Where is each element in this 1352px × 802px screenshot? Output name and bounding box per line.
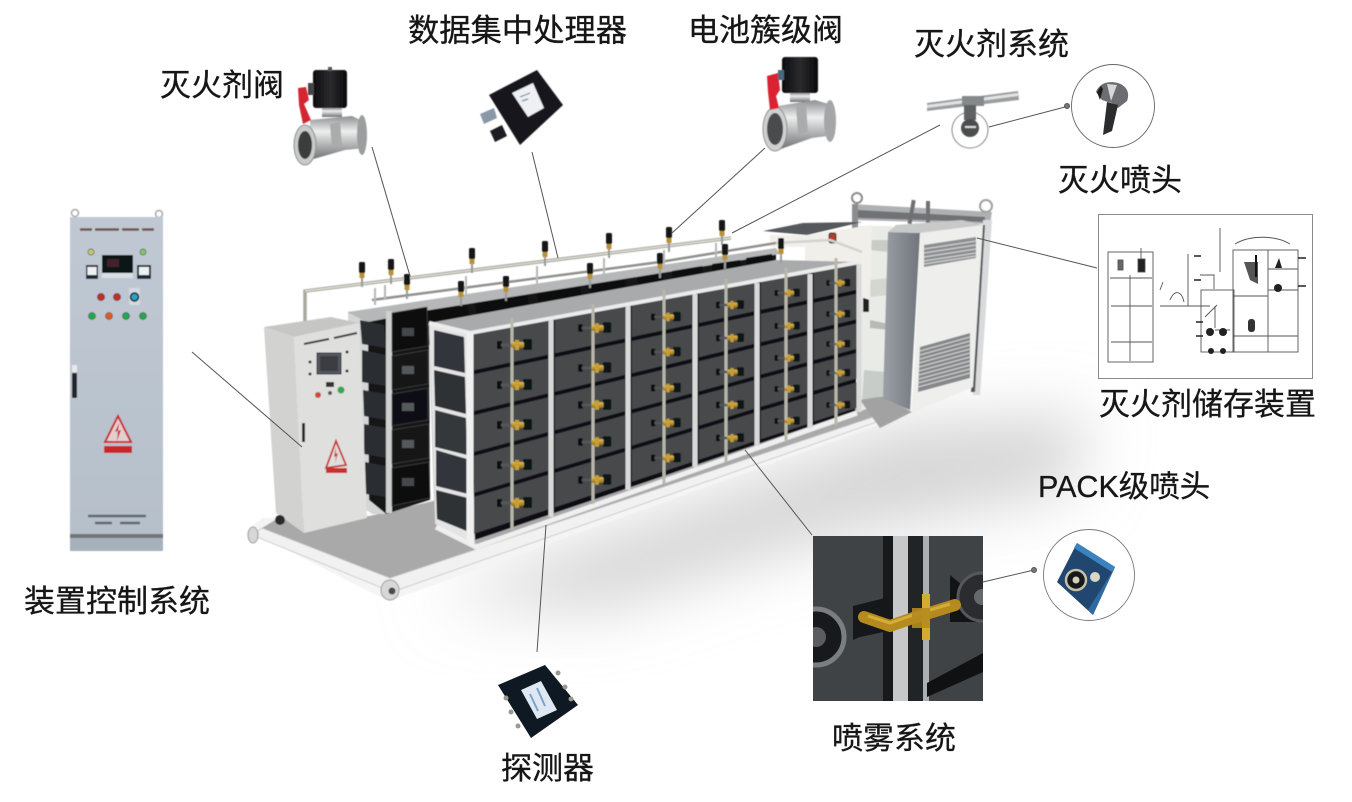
drawers column 6 bbox=[814, 264, 857, 422]
storage cabinet white face bbox=[912, 225, 983, 413]
digital display bbox=[102, 255, 133, 278]
upper louvre bbox=[924, 237, 976, 267]
interior tanks bbox=[858, 226, 912, 428]
label: 数据集中处理器: 数据集中处理器 bbox=[408, 13, 627, 48]
brass fitting bbox=[864, 594, 955, 640]
drawers column 2 bbox=[555, 306, 625, 507]
buttons bbox=[88, 288, 146, 320]
icon: fire system T pipe bbox=[927, 91, 1019, 148]
label: 电池簇级阀: 电池簇级阀 bbox=[688, 13, 843, 48]
icon: pack nozzle magnifier bbox=[1044, 530, 1134, 620]
leader lines bbox=[192, 104, 1097, 652]
drawers column 5 bbox=[761, 273, 807, 439]
vertical spray pipes bbox=[512, 258, 836, 530]
label: 喷雾系统: 喷雾系统 bbox=[832, 721, 956, 756]
icon: data processor bbox=[480, 70, 563, 145]
frame uprights and rails bbox=[429, 262, 860, 547]
door handle bbox=[72, 365, 77, 398]
platform base bbox=[248, 390, 915, 600]
label: 探测器: 探测器 bbox=[501, 751, 594, 786]
main container assembly bbox=[248, 193, 992, 600]
label: PACK级喷头: PACK级喷头 bbox=[1038, 470, 1210, 504]
warning sign bbox=[104, 416, 132, 453]
label: 灭火喷头: 灭火喷头 bbox=[1058, 163, 1182, 198]
drawers column 4 bbox=[699, 283, 754, 460]
icon: detector bbox=[498, 665, 578, 738]
floor shadow bbox=[430, 415, 1090, 610]
container end frame bbox=[852, 193, 992, 395]
warning triangle sign bbox=[326, 441, 347, 473]
front rack face bbox=[429, 258, 860, 547]
rear end equipment bbox=[763, 193, 992, 428]
label: 装置控制系统: 装置控制系统 bbox=[24, 584, 210, 619]
analog meters bbox=[86, 265, 151, 279]
panel: left control cabinet bbox=[70, 210, 163, 551]
storage cabinet grey side bbox=[883, 232, 920, 410]
lower louvre bbox=[918, 333, 970, 392]
right socket bbox=[950, 572, 983, 622]
left socket bbox=[813, 606, 846, 668]
icon: fire agent valve bbox=[294, 67, 367, 165]
icon: cluster valve bbox=[763, 57, 836, 151]
cabinet top bbox=[888, 220, 983, 233]
rack top black segments bbox=[428, 254, 774, 324]
pack fittings bbox=[497, 279, 850, 508]
cooling unit box bbox=[763, 222, 872, 300]
front rack end face bbox=[429, 323, 475, 545]
centre control cabinet bbox=[264, 317, 367, 533]
icon: nozzle magnifier bbox=[1072, 64, 1154, 148]
drawers column 1 bbox=[474, 320, 548, 534]
drawers column 3 bbox=[632, 294, 692, 482]
callout: storage device drawing bbox=[1098, 214, 1312, 378]
back battery rack bbox=[348, 248, 780, 514]
pipework bbox=[305, 238, 862, 324]
callout: spray system close-up bbox=[813, 536, 983, 701]
small circle bbox=[952, 112, 988, 148]
top cluster valves bbox=[359, 220, 784, 306]
label: 灭火剂系统: 灭火剂系统 bbox=[914, 27, 1069, 62]
label: 灭火剂储存装置: 灭火剂储存装置 bbox=[1099, 387, 1316, 422]
label: 灭火剂阀: 灭火剂阀 bbox=[160, 68, 284, 103]
front rack top surface bbox=[429, 260, 860, 333]
